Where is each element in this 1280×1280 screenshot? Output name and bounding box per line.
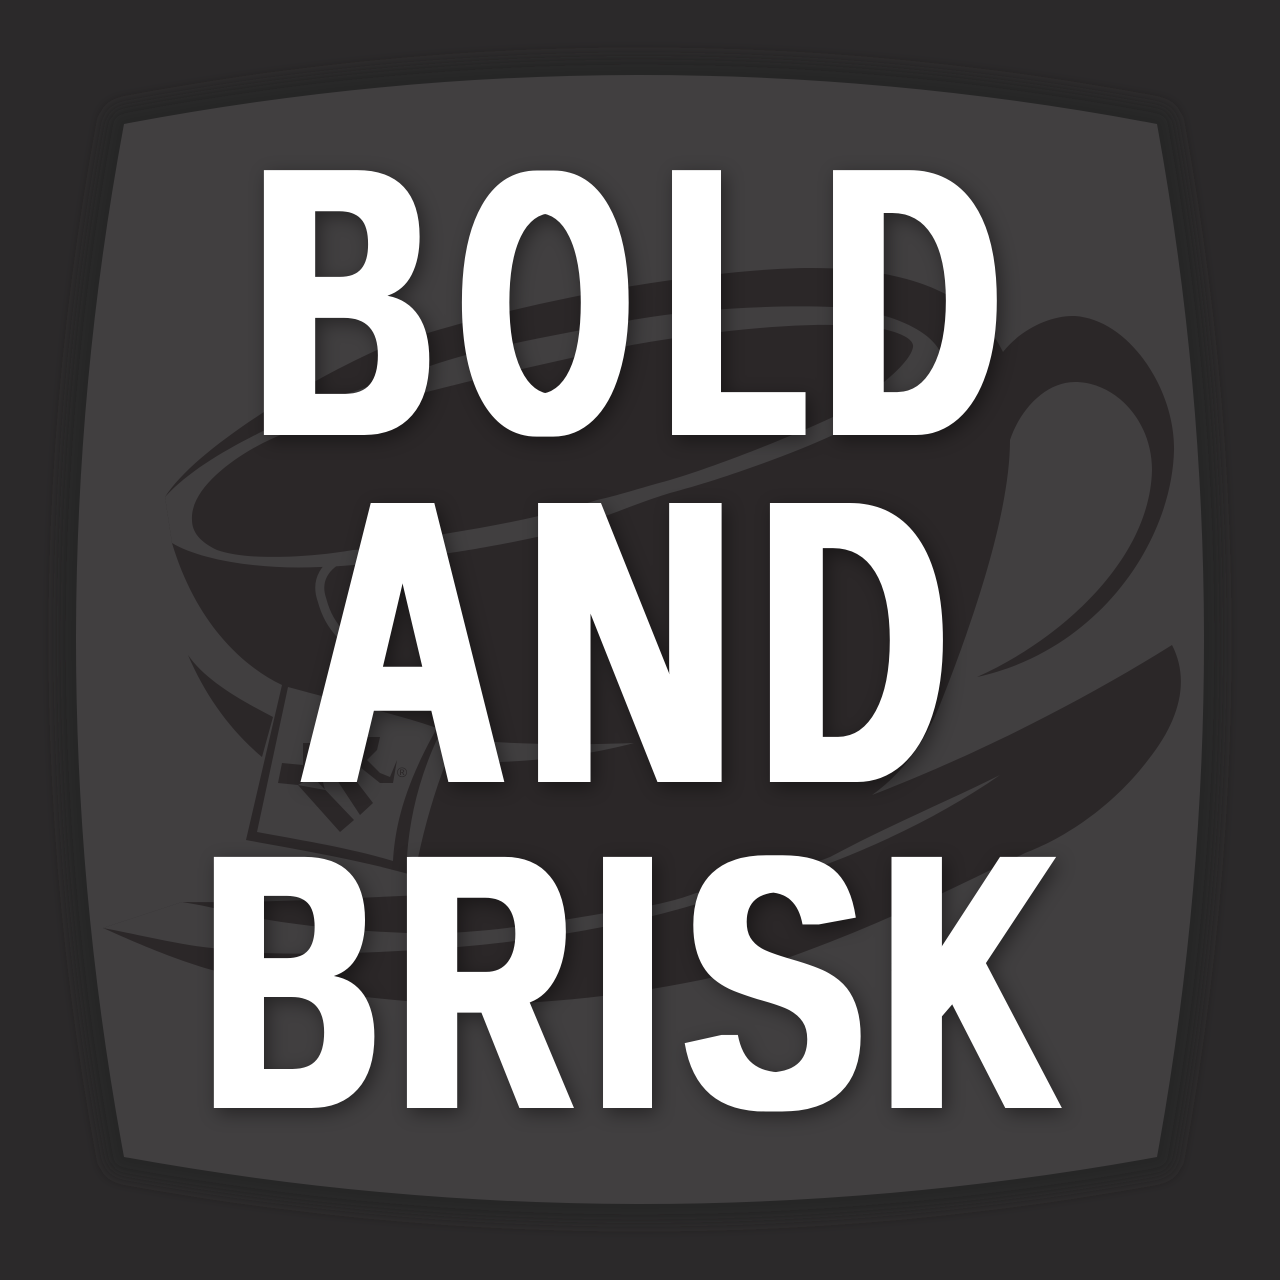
tag logo bbox=[278, 737, 397, 832]
word: BRISK: I bbox=[596, 777, 659, 1186]
word: BRISK: R bbox=[399, 779, 571, 1186]
word: AND: A bbox=[302, 415, 504, 868]
title: bold and brisk bbox=[206, 87, 1056, 1186]
cup and saucer silhouette bbox=[103, 268, 1181, 1004]
word: BRISK bbox=[206, 777, 1056, 1186]
word: AND bbox=[302, 415, 946, 869]
tag face bbox=[257, 687, 437, 861]
panel: curved square bbox=[76, 75, 1204, 1204]
tag edge highlight bbox=[407, 735, 447, 858]
word: BOLD: L bbox=[665, 87, 805, 518]
word: BRISK: K bbox=[884, 779, 1056, 1186]
registered mark: ® bbox=[397, 764, 408, 780]
word: AND: D bbox=[761, 415, 946, 868]
word: AND: N bbox=[527, 416, 733, 869]
word: BOLD: O bbox=[461, 94, 630, 514]
tea bag string bbox=[320, 556, 345, 636]
cup interior bbox=[192, 325, 913, 557]
icon: tea cup on saucer bbox=[103, 268, 1181, 1004]
word: BOLD: D bbox=[825, 87, 999, 518]
word: BRISK: B bbox=[206, 778, 377, 1186]
light streak behind letters bbox=[445, 738, 634, 763]
word: BOLD bbox=[256, 87, 999, 518]
lower left swoosh bbox=[188, 655, 273, 757]
word: BOLD: B bbox=[256, 88, 432, 517]
panel shadow bbox=[76, 75, 1204, 1204]
rim band bbox=[165, 306, 942, 568]
tea bag tag bbox=[257, 687, 437, 861]
saucer highlight stripe bbox=[103, 775, 1000, 954]
word: BRISK: S bbox=[685, 781, 863, 1185]
